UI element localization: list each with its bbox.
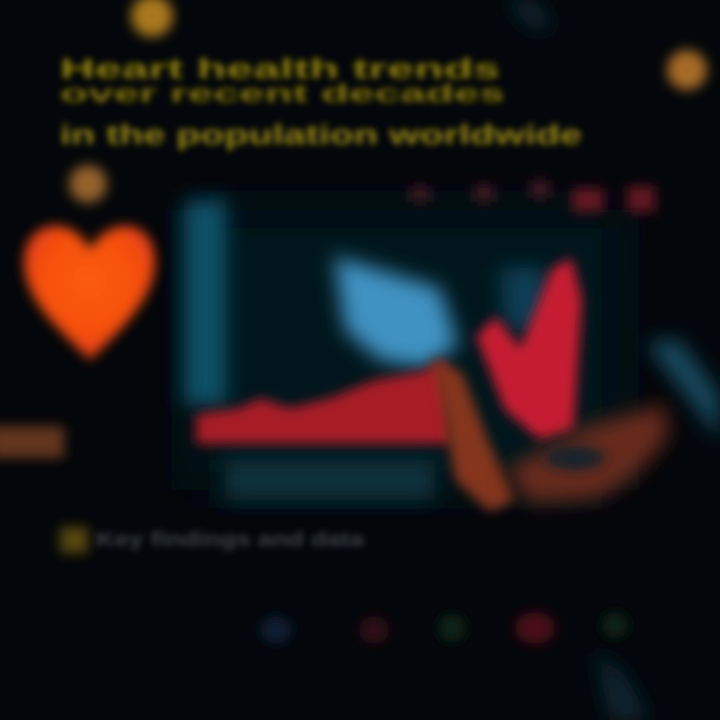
bottom data panel — [260, 612, 628, 644]
title — [60, 53, 582, 150]
diagonal teal streak — [645, 340, 720, 440]
chart — [184, 200, 720, 512]
section heading — [60, 527, 365, 553]
legend markers — [410, 180, 655, 212]
mid blue area — [500, 268, 555, 330]
data marker: crimson — [515, 612, 555, 644]
lower teal block — [225, 460, 435, 500]
decorative glowing dot: above heart — [69, 165, 107, 203]
bullet — [60, 527, 88, 553]
brown ribbon right — [505, 404, 668, 503]
blue area — [334, 256, 458, 368]
decorative glowing dot: top — [131, 0, 173, 37]
heading text: Key findings and data — [96, 529, 365, 551]
decorative glowing dot: top right — [667, 50, 707, 90]
side label — [0, 426, 64, 458]
data marker: blue — [260, 616, 292, 644]
red line band — [196, 362, 452, 444]
orange ribbon — [432, 358, 515, 512]
dark gap in ribbon — [545, 446, 605, 470]
data marker: red — [359, 616, 389, 644]
title: Heart health trends — [60, 53, 500, 84]
tall teal bar — [184, 200, 226, 405]
data marker: dark green — [602, 612, 628, 638]
title: over recent decades — [60, 80, 505, 108]
title: in the population worldwide — [60, 119, 582, 150]
icon: heart — [24, 226, 155, 360]
crimson peak — [476, 258, 582, 440]
data marker: green — [438, 614, 466, 642]
